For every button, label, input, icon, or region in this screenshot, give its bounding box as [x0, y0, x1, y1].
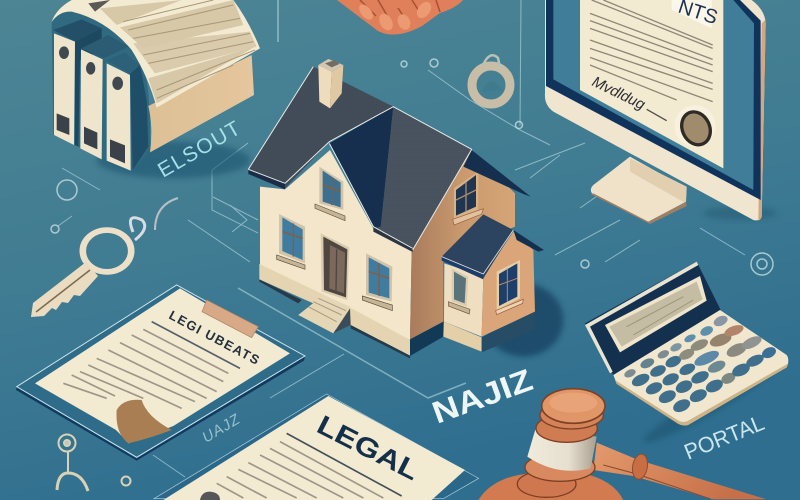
- screen frame: [546, 0, 761, 200]
- dark arch behind the binders: [52, 10, 150, 172]
- clipboard frame: [17, 285, 305, 457]
- icon: key: [31, 198, 178, 317]
- legal paper: [163, 396, 465, 500]
- computer monitor with certificate: [545, 0, 777, 224]
- legal paper lines: [217, 433, 402, 498]
- binding clip: [200, 492, 220, 500]
- calculator screen: [605, 276, 707, 352]
- calculator body: [613, 310, 788, 425]
- icon: padlock ring: [472, 55, 510, 104]
- annex side wall: [482, 232, 535, 337]
- gavel sound block: [478, 473, 623, 500]
- clipboard heading: LEGI UBEATS: [167, 307, 262, 368]
- calculator display housing: [585, 262, 721, 375]
- main roof: [248, 67, 531, 252]
- binder three: [107, 53, 148, 171]
- calculator: [585, 262, 788, 450]
- calculator keys: [623, 314, 778, 415]
- gavel handle: [593, 443, 767, 499]
- document: legal, bottom: [154, 394, 479, 500]
- icon: handshake: [337, 0, 463, 35]
- tan page stack: [148, 55, 254, 152]
- paper: [35, 288, 290, 443]
- curved front page: [52, 0, 260, 108]
- annex front wall: [444, 263, 483, 337]
- label: NAJIZ: NAJIZ: [427, 362, 537, 431]
- label: PORTAL: PORTAL: [681, 410, 768, 465]
- gavel: [478, 389, 767, 500]
- paper clip: [202, 300, 258, 338]
- window group: [277, 167, 523, 315]
- binder one: [53, 19, 102, 147]
- label: NAJZ: UAJZ: [199, 410, 244, 446]
- screen: [553, 0, 754, 190]
- binders and curved document: [52, 0, 260, 178]
- gavel upper collar: [536, 414, 597, 442]
- side brick wall: [410, 150, 515, 339]
- monitor stand: [591, 157, 687, 224]
- signature: Mvdldug: [589, 73, 648, 114]
- document on clipboard, left: [16, 285, 305, 461]
- gavel top disc: [542, 389, 605, 423]
- small node icons: [51, 59, 773, 275]
- gavel lower collar: [517, 471, 576, 497]
- front base: [259, 264, 410, 356]
- paper lines: [63, 322, 240, 408]
- legal heading: LEGAL: [312, 410, 424, 486]
- annex roof: [442, 214, 544, 279]
- front wall: [260, 150, 412, 340]
- icon: pin: [57, 434, 130, 491]
- curled corner: [116, 400, 172, 443]
- steps: [298, 295, 351, 333]
- certificate on screen: [580, 0, 723, 168]
- gavel white band: [527, 425, 597, 471]
- chimney: [318, 59, 343, 108]
- door: [321, 233, 349, 300]
- label: ELSOUT: ELSOUT: [154, 116, 246, 182]
- house: [248, 59, 563, 358]
- binder two: [80, 35, 128, 159]
- monitor body: [545, 0, 766, 220]
